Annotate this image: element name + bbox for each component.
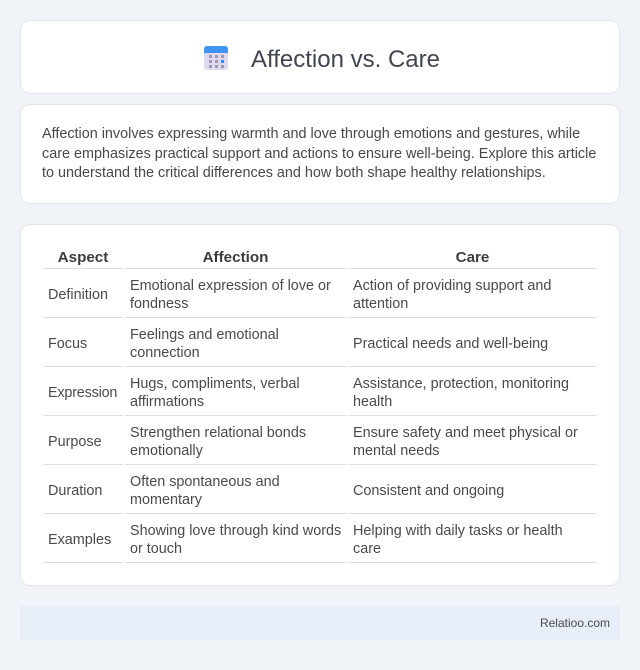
- row: Expression: health: [353, 394, 392, 410]
- row: Purpose: mental needs: [353, 443, 439, 459]
- row: Examples: Examples: [48, 532, 111, 548]
- row: Examples: Showing love through kind words: [130, 523, 341, 539]
- row: Focus: [48, 327, 548, 361]
- intro text: Affection involves expressing warmth and love through emotions and gestures, while: [42, 126, 580, 142]
- row: Examples: or touch: [130, 541, 182, 557]
- row: Purpose: Strengthen relational bonds: [130, 425, 306, 441]
- intro text: care emphasizes practical support and actions to ensure well-being. Explore this article: [42, 146, 596, 162]
- panel: comparison table: [20, 224, 620, 586]
- title: Affection vs. Care: [251, 46, 440, 73]
- row: Duration: Often spontaneous and: [130, 474, 280, 490]
- row: Expression: Assistance, protection, monitoring: [353, 376, 569, 392]
- row: Focus: Focus: [48, 336, 87, 352]
- row: Focus: Practical needs and well-being: [353, 336, 548, 352]
- row: Duration: Duration: [48, 483, 102, 499]
- panel: intro: [20, 104, 620, 204]
- row: Definition: Emotional expression of love or: [130, 278, 331, 294]
- table header: [58, 249, 489, 266]
- footer bar: [20, 606, 620, 640]
- row: Duration: Consistent and ongoing: [353, 483, 504, 499]
- row: Purpose: Purpose: [48, 434, 102, 450]
- row: Purpose: Ensure safety and meet physical or: [353, 425, 578, 441]
- intro text: [42, 126, 596, 181]
- row: Definition: Action of providing support and: [353, 278, 551, 294]
- row: Examples: [48, 523, 563, 557]
- row: Focus: Feelings and emotional: [130, 327, 279, 343]
- row: Expression: Expression: [48, 385, 117, 401]
- row: Purpose: [48, 425, 578, 459]
- row: Expression: [48, 376, 569, 410]
- footer text: Relatioo.com: [540, 616, 610, 630]
- row: Focus: connection: [130, 345, 200, 361]
- row: Definition: attention: [353, 296, 408, 312]
- intro text: to understand the critical differences and how both shape healthy relationships.: [42, 165, 546, 181]
- row: Definition: Definition: [48, 287, 108, 303]
- row: Duration: momentary: [130, 492, 202, 508]
- table header: Care: [456, 249, 489, 266]
- icon: calendar: [204, 46, 228, 70]
- table header: Aspect: [58, 249, 108, 266]
- row: Purpose: emotionally: [130, 443, 203, 459]
- table header: Affection: [203, 249, 268, 266]
- row: Definition: [48, 278, 551, 312]
- row: Expression: affirmations: [130, 394, 204, 410]
- row: Examples: Helping with daily tasks or health: [353, 523, 563, 539]
- row: Expression: Hugs, compliments, verbal: [130, 376, 300, 392]
- panel: title card: [20, 20, 620, 94]
- row: Duration: [48, 474, 504, 508]
- row: Definition: fondness: [130, 296, 188, 312]
- row: Examples: care: [353, 541, 381, 557]
